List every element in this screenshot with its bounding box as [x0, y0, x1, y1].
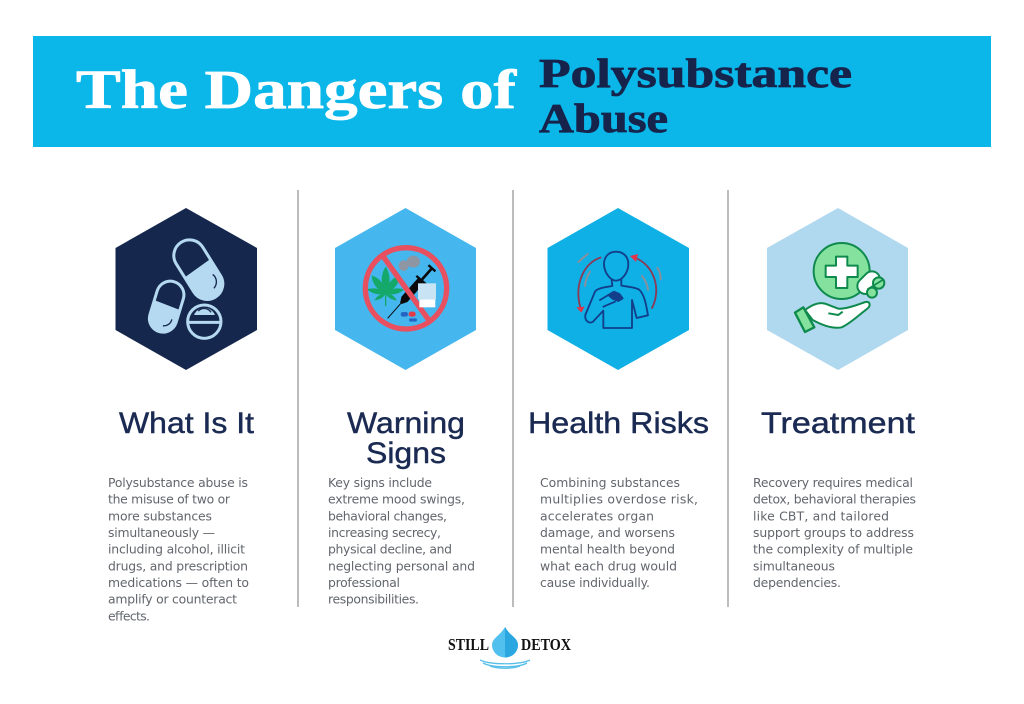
- body: warning signs: professional: [328, 575, 400, 590]
- panel: what is it: [108, 208, 257, 623]
- body: treatment: like CBT, and tailored: [753, 508, 889, 523]
- body: treatment: [753, 475, 916, 590]
- body: warning signs: Key signs include: [328, 475, 432, 490]
- body: treatment: dependencies.: [753, 575, 841, 590]
- body: treatment: the complexity of multiple: [753, 542, 913, 557]
- body: health risks: cause individually.: [540, 575, 650, 590]
- heading: what is it: What Is It: [119, 407, 255, 440]
- title: navy part: Abuse: [539, 95, 668, 141]
- title: navy part: Polysubstance: [539, 50, 852, 96]
- panel: warning signs: [328, 208, 476, 607]
- heading: treatment: Treatment: [761, 407, 916, 440]
- body: what is it: [108, 475, 249, 623]
- title: navy part: [539, 50, 852, 141]
- body: what is it: more substances: [108, 508, 212, 523]
- body: warning signs: responsibilities.: [328, 592, 419, 607]
- heading: warning signs: Signs: [366, 437, 446, 470]
- body: what is it: Polysubstance abuse is: [108, 475, 248, 490]
- body: treatment: detox, behavioral therapies: [753, 492, 916, 507]
- body: what is it: the misuse of two or: [108, 492, 231, 507]
- body: health risks: Combining substances: [540, 475, 680, 490]
- body: health risks: mental health beyond: [540, 542, 675, 557]
- hexagon with prohibited drugs icon: [335, 208, 476, 370]
- body: health risks: multiplies overdose risk,: [540, 492, 698, 507]
- hexagon with body and arrows icon: [548, 208, 689, 370]
- body: health risks: [540, 475, 698, 590]
- logo: still detox: DETOX: [521, 635, 572, 654]
- body: what is it: medications — often to: [108, 575, 249, 590]
- body: what is it: simultaneously —: [108, 525, 215, 540]
- body: what is it: effects.: [108, 608, 150, 623]
- body: what is it: including alcohol, illicit: [108, 542, 245, 557]
- body: treatment: support groups to address: [753, 525, 914, 540]
- body: health risks: what each drug would: [540, 558, 677, 573]
- icon: water drop: [492, 627, 518, 658]
- hexagon with pills icon: [116, 208, 257, 370]
- body: warning signs: [328, 475, 475, 607]
- body: warning signs: physical decline, and: [328, 542, 452, 557]
- hexagon with hand and medicine icon: [767, 208, 908, 370]
- body: warning signs: neglecting personal and: [328, 558, 475, 573]
- panel: health risks: [528, 208, 709, 590]
- body: warning signs: behavioral changes,: [328, 508, 447, 523]
- body: warning signs: increasing secrecy,: [328, 525, 441, 540]
- logo: still detox: [448, 627, 572, 668]
- panel: treatment: [753, 208, 916, 590]
- title: white part: The Dangers of: [76, 59, 517, 120]
- body: treatment: Recovery requires medical: [753, 475, 913, 490]
- body: treatment: simultaneous: [753, 558, 835, 573]
- title banner: [33, 36, 991, 147]
- body: warning signs: extreme mood swings,: [328, 492, 465, 507]
- icon: ripples: [480, 660, 530, 668]
- body: health risks: accelerates organ: [540, 508, 654, 523]
- body: what is it: drugs, and prescription: [108, 558, 248, 573]
- heading: warning signs: [347, 407, 465, 470]
- body: health risks: damage, and worsens: [540, 525, 675, 540]
- heading: warning signs: Warning: [347, 407, 465, 440]
- heading: health risks: Health Risks: [528, 407, 709, 440]
- logo: still detox: STILL: [448, 635, 489, 654]
- body: what is it: amplify or counteract: [108, 592, 237, 607]
